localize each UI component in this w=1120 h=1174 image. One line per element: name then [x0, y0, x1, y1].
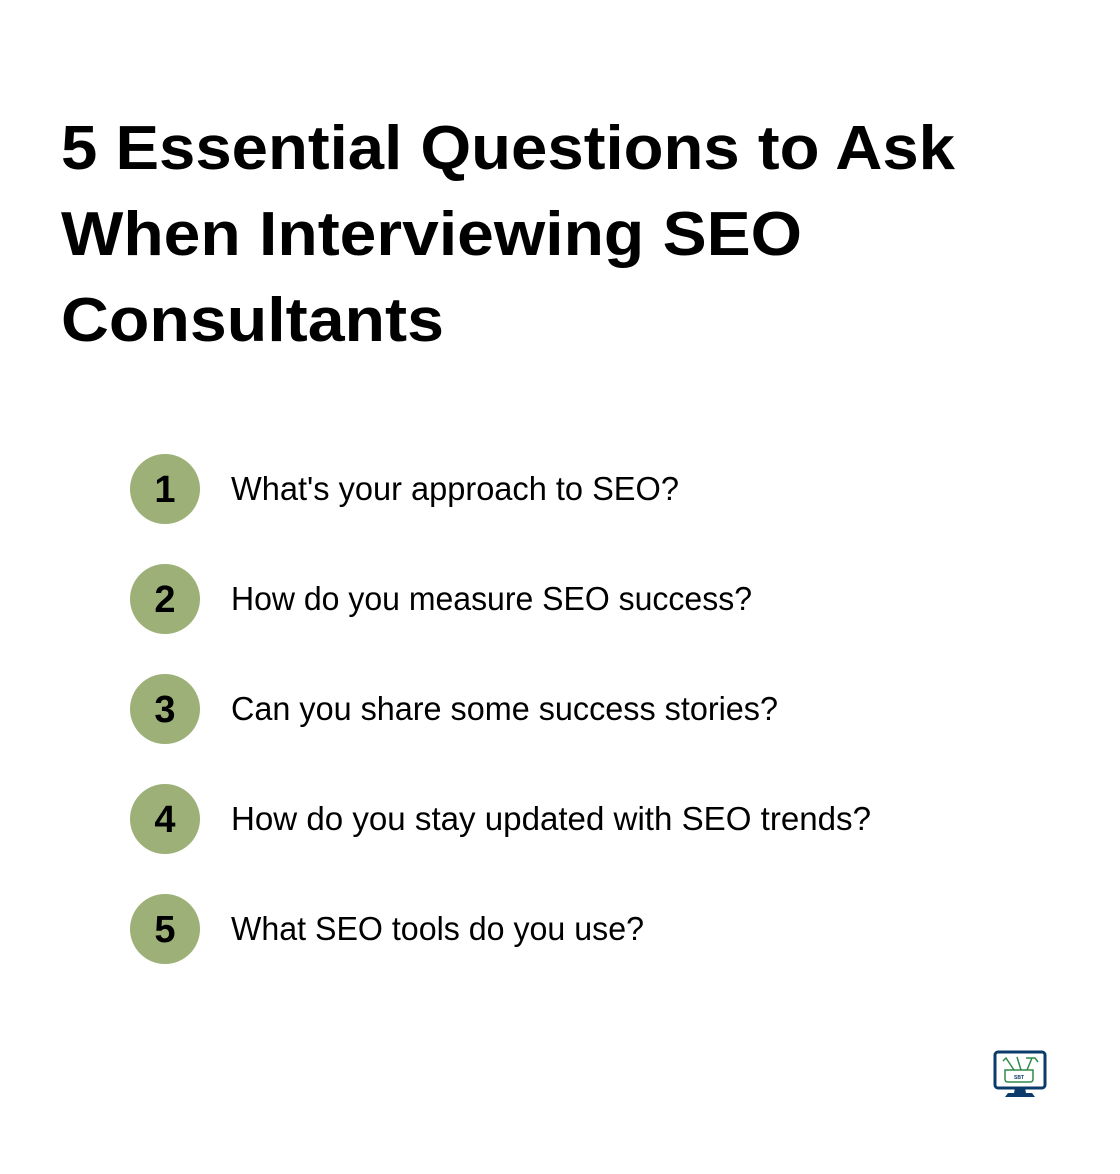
item 4	[130, 784, 871, 854]
item 2: How do you measure SEO success?	[231, 581, 752, 618]
question list	[130, 454, 871, 964]
item 5: 5	[154, 909, 176, 951]
icon: SBT monitor logo: SBT	[1014, 1075, 1024, 1081]
title: Consultants	[61, 286, 444, 355]
title	[61, 114, 956, 355]
title: When Interviewing SEO	[61, 200, 802, 269]
item 1: What's your approach to SEO?	[231, 471, 679, 508]
item 4: 4	[154, 799, 176, 841]
item 2: 2	[154, 579, 176, 621]
item 1: 1	[154, 469, 176, 511]
item 3: Can you share some success stories?	[231, 691, 778, 728]
item 5	[130, 894, 644, 964]
item 2	[130, 564, 752, 634]
item 5: What SEO tools do you use?	[231, 911, 644, 948]
title: 5 Essential Questions to Ask	[61, 114, 956, 183]
item 3	[130, 674, 778, 744]
icon: SBT monitor logo	[995, 1052, 1045, 1097]
item 1	[130, 454, 679, 524]
item 4: How do you stay updated with SEO trends?	[231, 801, 871, 838]
item 3: 3	[154, 689, 176, 731]
